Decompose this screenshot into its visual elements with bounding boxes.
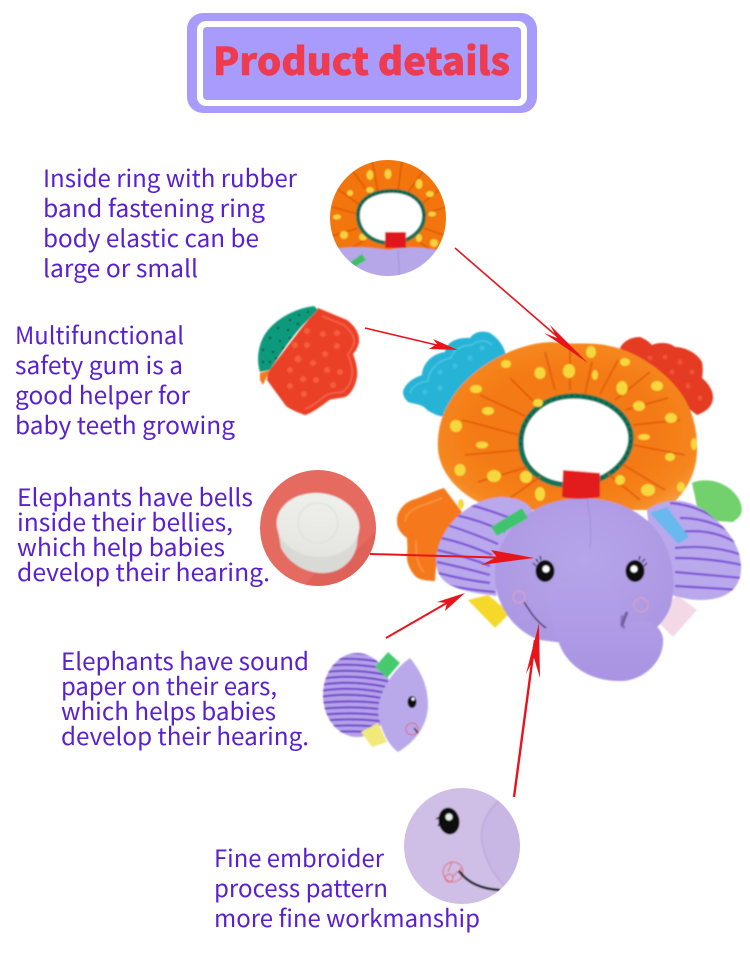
text: safety gum <box>15 316 235 441</box>
bell puck <box>278 532 359 574</box>
main toy: elephant ring rattle <box>397 332 742 681</box>
text: safety gum: baby teeth growing <box>15 406 235 441</box>
trunk <box>549 580 663 681</box>
ribbon tag: green <box>491 508 528 536</box>
text: inside ring <box>43 159 298 284</box>
text: bells: develop their hearing. <box>17 553 270 588</box>
text: embroidery: Fine embroider <box>214 839 385 874</box>
ear: right <box>647 501 742 600</box>
text: sound paper: develop their hearing. <box>61 717 309 752</box>
arrow: gum <box>365 328 458 350</box>
text: bells <box>17 478 270 588</box>
detail: ear with sound paper <box>320 652 428 752</box>
ribbon tag: red <box>562 470 600 499</box>
detail circle: ring interior <box>330 160 446 276</box>
text: sound paper: Elephants have sound <box>61 642 309 677</box>
teether: blue <box>403 332 506 417</box>
text: embroidery: more fine workmanship <box>214 899 480 934</box>
text: inside ring: large or small <box>43 249 198 284</box>
eye: left <box>533 556 554 582</box>
text: inside ring: Inside ring with rubber <box>43 159 298 194</box>
title banner <box>187 13 537 113</box>
text: sound paper: which helps babies <box>61 692 276 727</box>
text: inside ring: band fastening ring <box>43 189 265 224</box>
teether: green <box>692 480 742 522</box>
text: safety gum: good helper for <box>15 376 191 411</box>
text: inside ring: body elastic can be <box>43 219 259 254</box>
ribbon tag: yellow <box>468 595 510 628</box>
text: bells: Elephants have bells <box>17 478 253 513</box>
ribbon tag: blue <box>650 507 689 544</box>
title text: Product details <box>213 31 510 86</box>
plush ring <box>438 342 697 510</box>
text: sound paper: paper on their ears, <box>61 667 277 702</box>
arrow: ear <box>386 593 465 638</box>
text: bells: which help babies <box>17 528 225 563</box>
ear: left <box>436 497 533 596</box>
text: embroidery <box>214 839 480 934</box>
embroidered mouth and cheeks <box>513 591 648 628</box>
arrow: bell <box>370 550 534 565</box>
detail: teether gum <box>258 306 359 415</box>
text: safety gum: Multifunctional <box>15 316 184 351</box>
text: embroidery: process pattern <box>214 869 388 904</box>
text: bells: inside their bellies, <box>17 503 233 538</box>
head <box>495 498 674 650</box>
detail circle: bell <box>258 468 378 590</box>
arrow: ring <box>455 248 588 363</box>
eye: right <box>626 556 647 582</box>
teether fabric cap <box>258 306 318 372</box>
arrow: embroidery <box>514 623 540 797</box>
teether: red <box>620 337 713 415</box>
ring polka dots <box>450 346 697 509</box>
detail circle: embroidery <box>402 786 525 906</box>
text: sound paper <box>61 642 309 752</box>
text: safety gum: safety gum is a <box>15 346 183 381</box>
ribbon tag: pink <box>653 595 697 637</box>
teether: orange <box>397 488 462 581</box>
